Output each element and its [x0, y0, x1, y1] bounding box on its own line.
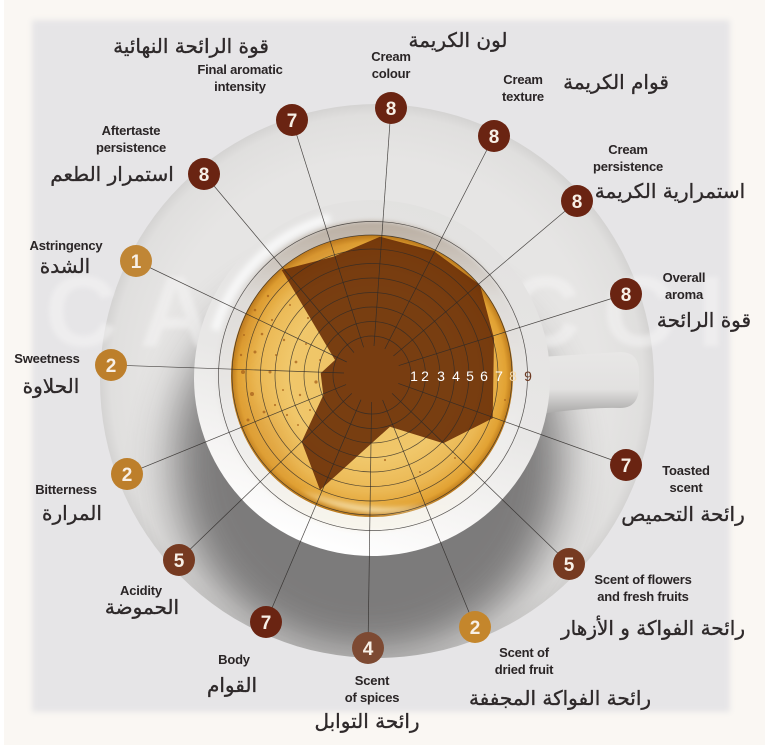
- label: spices: Scent: [355, 673, 390, 688]
- label: body: [207, 652, 257, 697]
- saucer and shadow: [100, 104, 654, 658]
- score: spices 4: 4: [363, 639, 374, 660]
- score: cream persistence 8: 8: [572, 192, 582, 213]
- scale numbers 1 to 9: 2: [421, 368, 429, 384]
- label: sweetness: الحلاوة: [23, 374, 79, 398]
- score: cream colour 8: 8: [386, 99, 396, 120]
- label: dried fruit: Scent of: [499, 645, 550, 660]
- score: astringency 1: [120, 245, 152, 277]
- cup: [194, 200, 550, 556]
- score: bitterness 2: [111, 458, 143, 490]
- label: cream texture: Cream: [503, 72, 543, 87]
- label: cream colour: لون الكريمة: [408, 28, 508, 52]
- label: cream persistence: Cream: [608, 142, 648, 157]
- score: flowers and fresh fruits 5: [553, 548, 585, 580]
- label: cream colour: [371, 28, 508, 81]
- label: cream texture: [502, 70, 669, 104]
- score: body 7: [250, 606, 282, 638]
- score: aftertaste persistence 8: [188, 158, 220, 190]
- label: cream persistence: [593, 142, 745, 203]
- scale numbers 1 to 9: [410, 368, 532, 384]
- label: aftertaste persistence: [50, 123, 174, 186]
- score: cream colour 8: [375, 92, 407, 124]
- score: sweetness 2: [95, 349, 127, 381]
- label: overall aroma: Overall: [663, 270, 705, 285]
- score: final aromatic intensity 7: [276, 104, 308, 136]
- label: final aromatic intensity: intensity: [214, 79, 267, 94]
- label: toasted scent: Toasted: [662, 463, 710, 478]
- radar spokes: [111, 108, 626, 648]
- watermark: CAPSUCCI: [45, 256, 725, 368]
- label: spices: رائحة التوابل: [314, 709, 420, 733]
- label: flowers and fresh fruits: Scent of flowers: [594, 572, 692, 587]
- score: overall aroma 8: [610, 278, 642, 310]
- label: cream persistence: persistence: [593, 159, 663, 174]
- label: flowers and fresh fruits: and fresh fruits: [597, 589, 689, 604]
- label: flowers and fresh fruits: [560, 572, 745, 640]
- radar polygon: [282, 237, 494, 490]
- label: dried fruit: رائحة الفواكة المجففة: [469, 686, 651, 710]
- label: cream texture: texture: [502, 89, 544, 104]
- label: acidity: الحموضة: [105, 595, 179, 619]
- label: spices: of spices: [345, 690, 399, 705]
- label: toasted scent: [621, 463, 745, 526]
- score: acidity 5: 5: [174, 551, 185, 572]
- score: toasted scent 7: 7: [621, 456, 631, 477]
- label: aftertaste persistence: Aftertaste: [102, 123, 160, 138]
- score: astringency 1: 1: [131, 252, 142, 273]
- label: overall aroma: aroma: [665, 287, 704, 302]
- label: final aromatic intensity: Final aromatic: [197, 62, 283, 77]
- label: acidity: Acidity: [120, 583, 163, 598]
- score: aftertaste persistence 8: 8: [199, 165, 209, 186]
- label: acidity: [105, 583, 179, 619]
- coffee surface: [231, 232, 513, 517]
- score: spices 4: [352, 632, 384, 664]
- score: cream texture 8: 8: [489, 127, 499, 148]
- radar rings: [218, 222, 528, 530]
- label: bitterness: المرارة: [42, 501, 102, 525]
- label: bitterness: [35, 482, 102, 525]
- scale numbers 1 to 9: 8: [509, 368, 517, 384]
- label: bitterness: Bitterness: [35, 482, 97, 497]
- label: cream colour: Cream: [371, 49, 411, 64]
- score: cream texture 8: [478, 120, 510, 152]
- scale numbers 1 to 9: 3: [437, 368, 445, 384]
- cup handle: [540, 352, 639, 414]
- label: astringency: [30, 238, 103, 278]
- score: overall aroma 8: 8: [621, 285, 631, 306]
- score: flowers and fresh fruits 5: 5: [564, 555, 575, 576]
- label: aftertaste persistence: استمرار الطعم: [50, 162, 174, 186]
- label: body: Body: [218, 652, 251, 667]
- label: overall aroma: قوة الرائحة: [657, 308, 751, 332]
- label: aftertaste persistence: persistence: [96, 140, 166, 155]
- label: cream persistence: استمرارية الكريمة: [595, 179, 745, 203]
- label: dried fruit: [469, 645, 651, 710]
- score: dried fruit 2: [459, 611, 491, 643]
- score: dried fruit 2: 2: [470, 618, 480, 639]
- score: final aromatic intensity 7: 7: [287, 111, 297, 132]
- label: dried fruit: dried fruit: [495, 662, 554, 677]
- score: body 7: 7: [261, 613, 271, 634]
- score: sweetness 2: 2: [106, 356, 116, 377]
- label: cream texture: قوام الكريمة: [563, 70, 669, 94]
- scale numbers 1 to 9: 1: [410, 368, 418, 384]
- scale numbers 1 to 9: 5: [466, 368, 474, 384]
- scale numbers 1 to 9: 9: [524, 368, 532, 384]
- label: sweetness: [14, 351, 80, 398]
- label: final aromatic intensity: [113, 34, 283, 94]
- label: flowers and fresh fruits: رائحة الفواكة و الأزهار: [560, 616, 745, 640]
- label: final aromatic intensity: قوة الرائحة النهائية: [113, 34, 269, 58]
- label: toasted scent: scent: [670, 480, 703, 495]
- label: astringency: الشدة: [40, 254, 90, 278]
- label: body: القوام: [207, 673, 257, 697]
- label: astringency: Astringency: [30, 238, 103, 253]
- label: toasted scent: رائحة التحميص: [621, 502, 745, 526]
- score: toasted scent 7: [610, 449, 642, 481]
- scale numbers 1 to 9: 6: [480, 368, 488, 384]
- label: sweetness: Sweetness: [14, 351, 80, 366]
- score: bitterness 2: 2: [122, 465, 132, 486]
- label: overall aroma: [657, 270, 751, 332]
- scale numbers 1 to 9: 4: [452, 368, 460, 384]
- label: cream colour: colour: [372, 66, 410, 81]
- score: acidity 5: [163, 544, 195, 576]
- score: cream persistence 8: [561, 185, 593, 217]
- label: spices: [314, 673, 420, 733]
- scale numbers 1 to 9: 7: [495, 368, 503, 384]
